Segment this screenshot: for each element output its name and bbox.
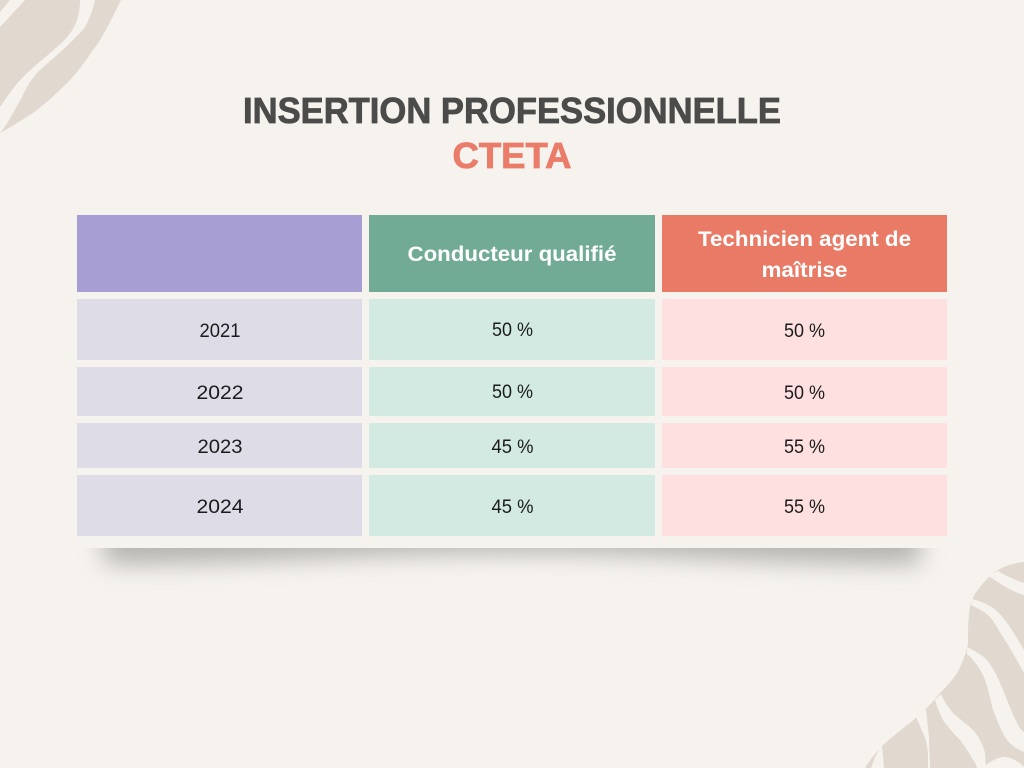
header: empty corner [77,215,362,292]
row 2022: 50 % [492,382,533,403]
row 2022: 2022 [196,383,244,404]
table [77,215,947,536]
header: Conducteur qualifié: Conducteur qualifié [408,243,616,266]
row 2023: 45 % [492,437,534,458]
row 2024: 2024 [196,497,244,518]
row 2021 [77,299,947,360]
row 2024: 55 % [784,497,825,518]
header: Technicien agent de maîtrise: Technicien agent de [698,228,911,251]
row 2021: 2021 [200,321,240,342]
row 2024 [77,475,947,536]
row 2023 [77,423,947,468]
row 2021: 50 % [784,321,825,342]
header: Technicien agent de maîtrise: maîtrise [762,259,848,282]
row 2024: 45 % [492,497,534,518]
decoration: top-left leaf [0,0,121,133]
table drop shadow [91,548,933,578]
row 2023: 2023 [198,437,242,458]
row 2021: 50 % [492,320,533,341]
header: Conducteur qualifié [369,215,655,292]
row 2022 [77,367,947,416]
row 2022: 50 % [784,383,825,404]
title [243,90,781,176]
title line 1: INSERTION PROFESSIONNELLE [243,90,781,131]
header: Technicien agent de maîtrise [662,215,947,292]
decoration: bottom-right leaf [865,562,1024,768]
row 2023: 55 % [784,437,825,458]
title line 2: CTETA [452,135,572,176]
